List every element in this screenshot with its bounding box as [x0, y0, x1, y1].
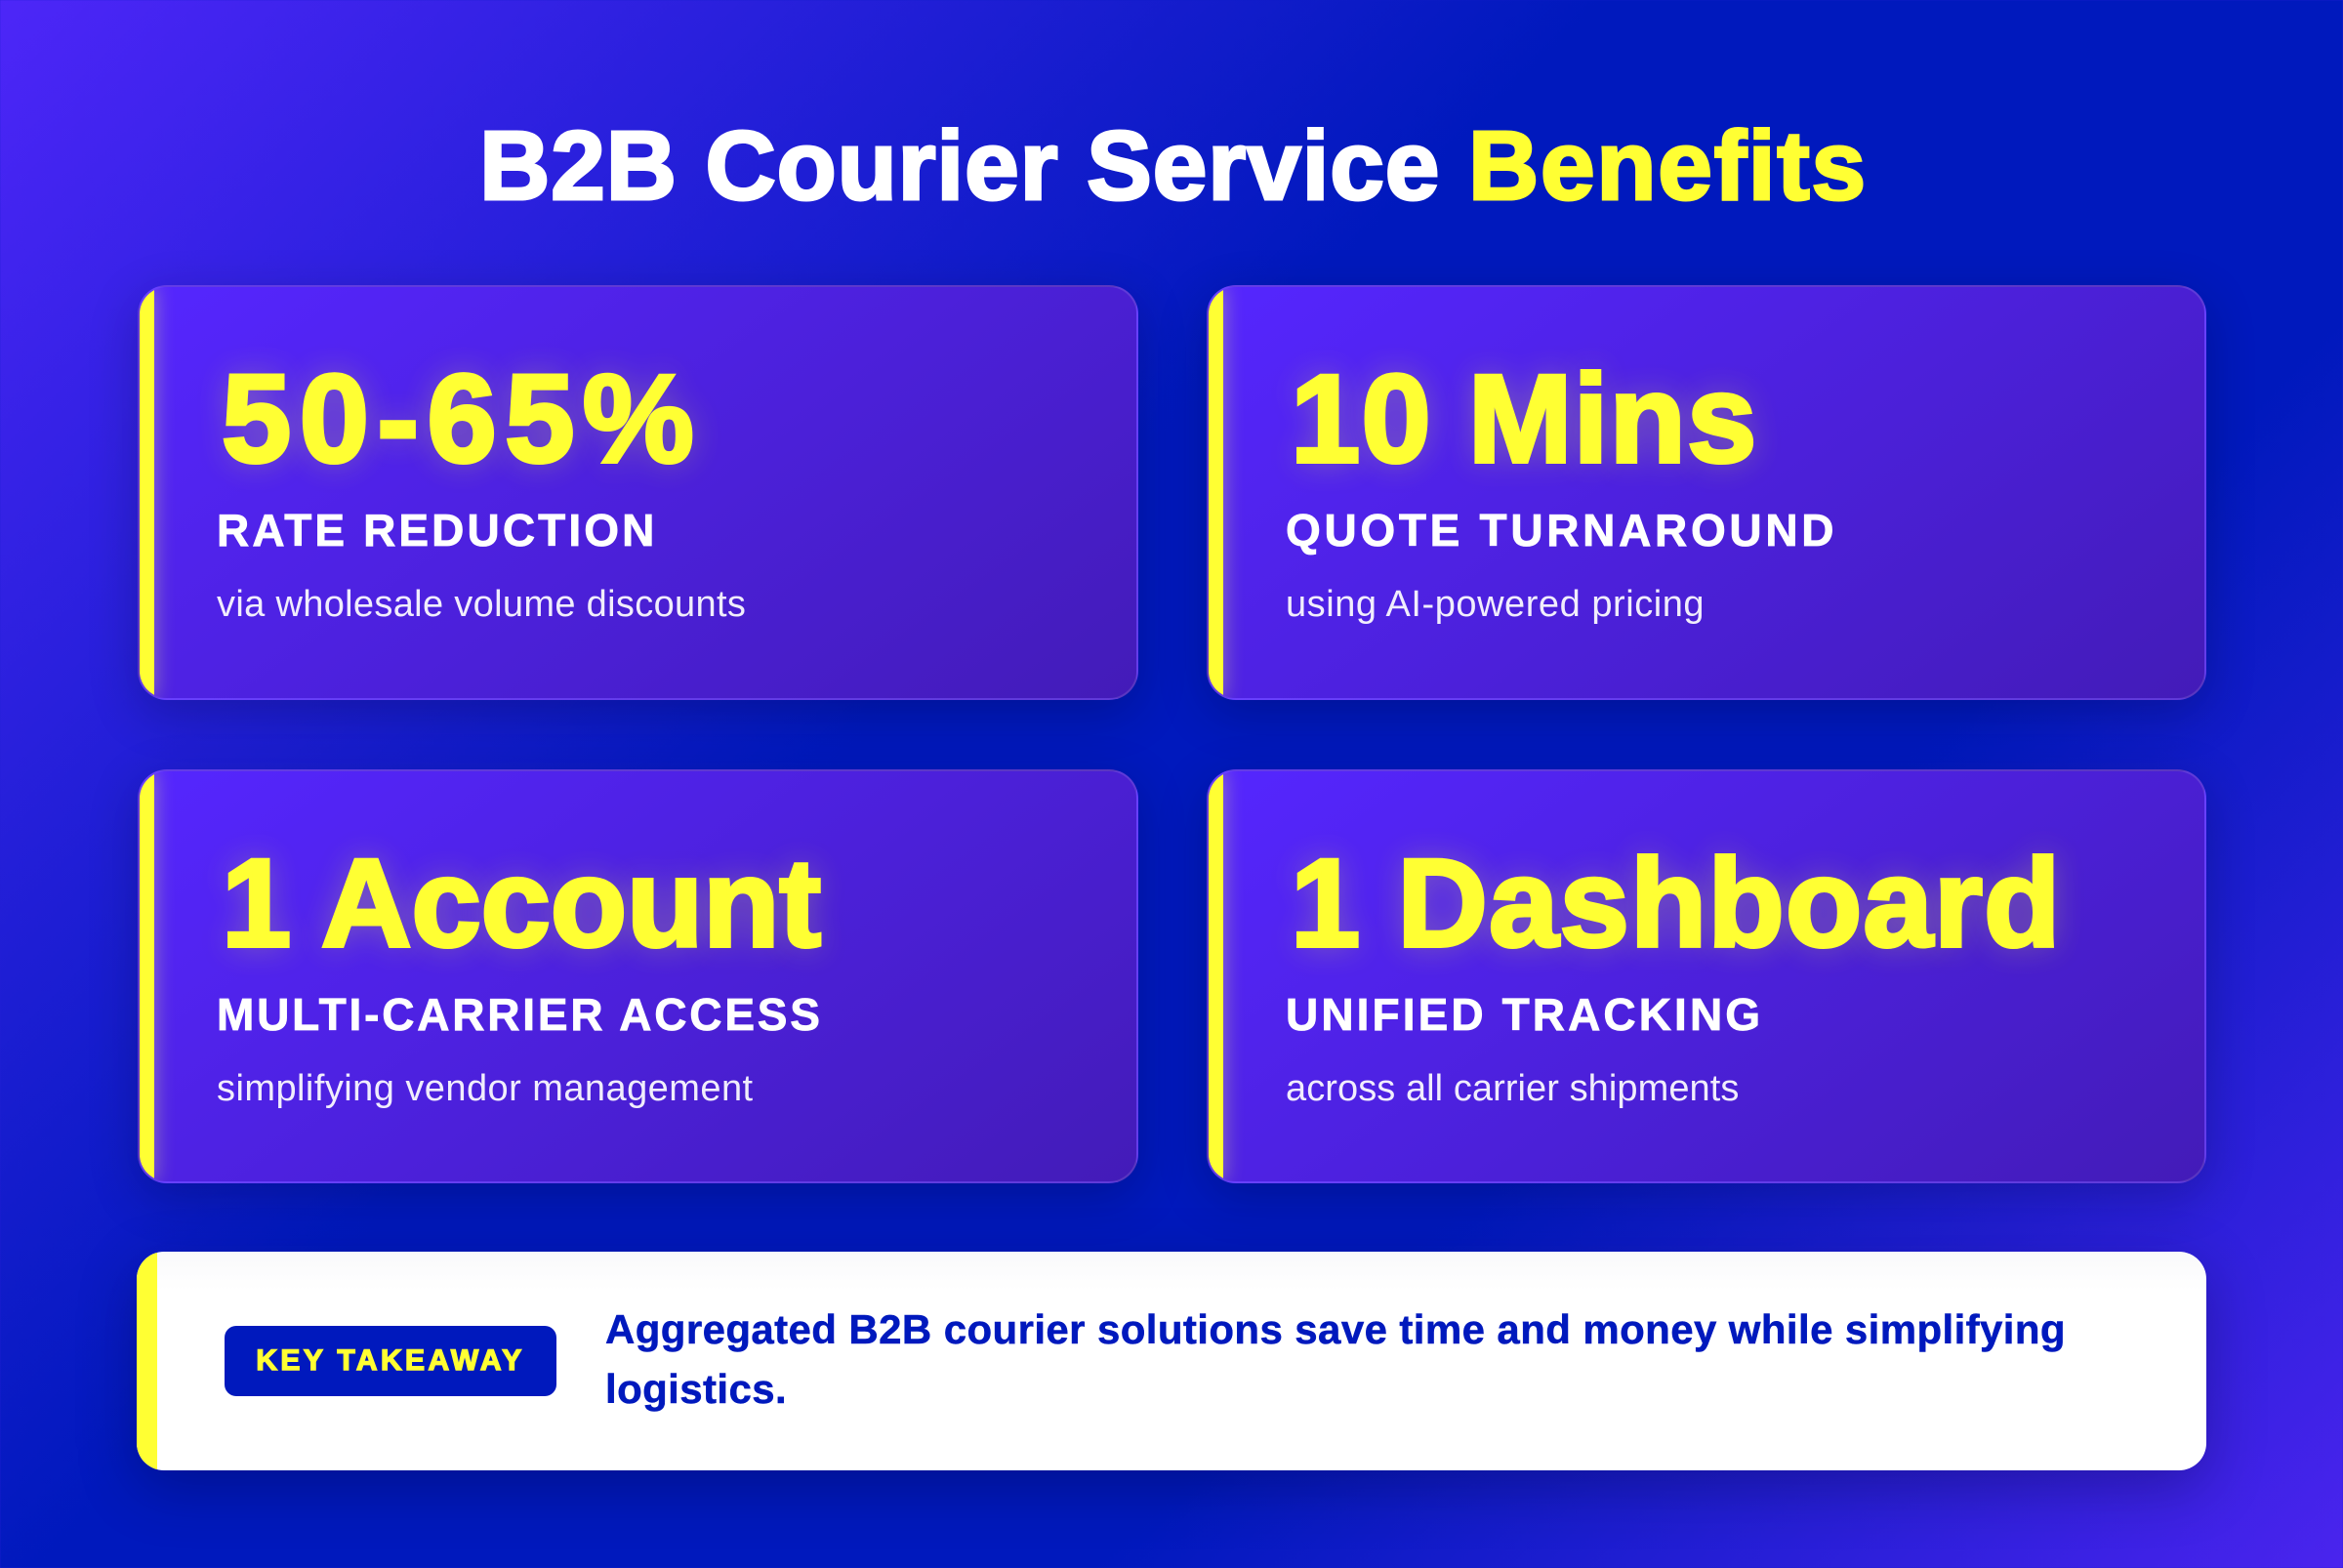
description: via wholesale volume discounts: [217, 584, 746, 625]
stat: 50-65%: 50-65%: [222, 350, 702, 489]
accent bar: [1209, 771, 1223, 1181]
label: unified tracking: UNIFIED TRACKING: [1286, 989, 1763, 1040]
accent bar: [1209, 287, 1223, 698]
accent bar: [137, 1252, 157, 1470]
label: multi-carrier access: MULTI-CARRIER ACCESS: [217, 989, 823, 1040]
panel: rate reduction: [138, 285, 1138, 700]
accent bar: [140, 287, 154, 698]
description: across all carrier shipments: [1286, 1068, 1739, 1109]
accent bar: [140, 771, 154, 1181]
panel: quote turnaround: [1207, 285, 2206, 700]
stat: 10 Mins: 10 Mins: [1291, 350, 1758, 489]
description: using AI-powered pricing: [1286, 584, 1705, 625]
takeaway message: [605, 1306, 2066, 1412]
label: quote turnaround: QUOTE TURNAROUND: [1286, 505, 1837, 556]
stat: 1 Dashboard: 1 Dashboard: [1291, 834, 2062, 973]
label: rate reduction: RATE REDUCTION: [217, 505, 657, 556]
panel: multi-carrier access: [138, 769, 1138, 1183]
stat: 1 Account: 1 Account: [222, 834, 821, 973]
badge: key takeaway: [225, 1326, 556, 1396]
takeaway message: logistics.: [605, 1366, 787, 1412]
title: B2B Courier Service Benefits: [479, 111, 1868, 221]
description: simplifying vendor management: [217, 1068, 754, 1109]
panel: unified tracking: [1207, 769, 2206, 1183]
panel: key takeaway: [137, 1252, 2206, 1470]
takeaway message: Aggregated B2B courier solutions save time and money while simplifying: [605, 1306, 2066, 1352]
badge: key takeaway: KEY TAKEAWAY: [256, 1344, 525, 1377]
